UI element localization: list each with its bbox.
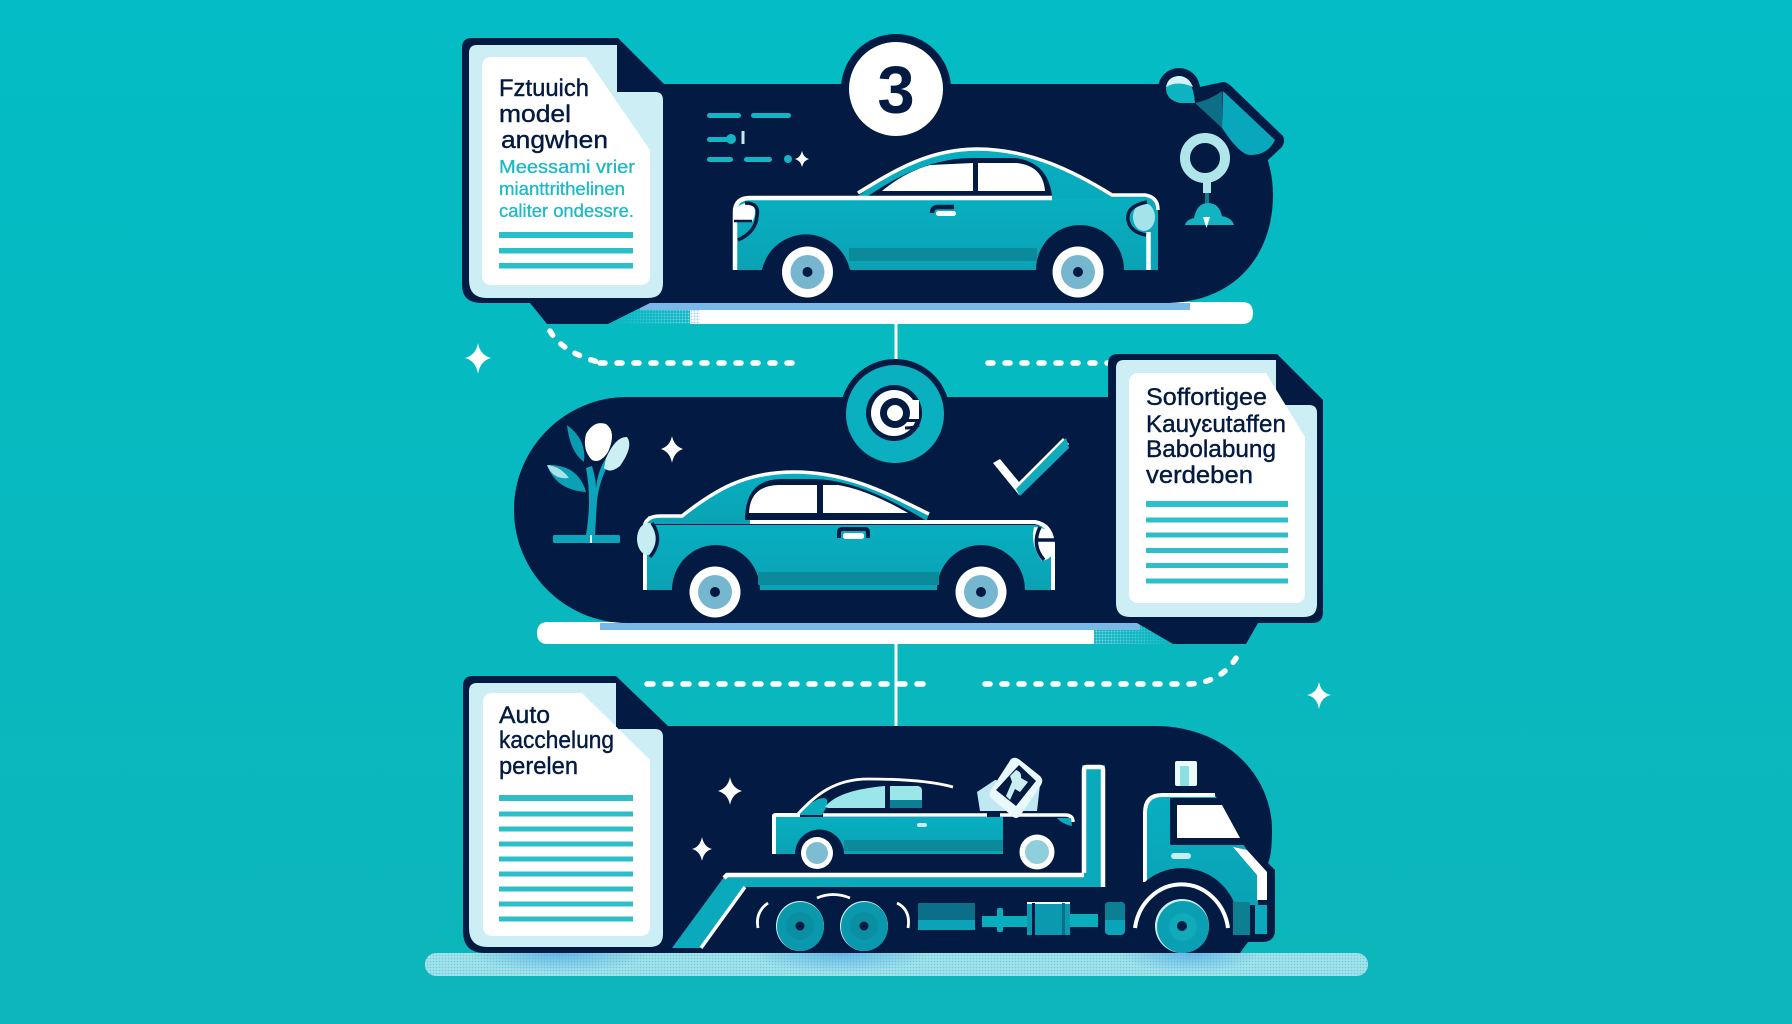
sparkle: lower	[692, 837, 712, 861]
wheel	[1155, 899, 1209, 953]
car 1	[734, 149, 1158, 298]
text lines 1	[499, 232, 633, 268]
heading 2: verdeben	[1146, 462, 1253, 489]
text block 1: Meessami vrier	[499, 157, 635, 177]
text block 1: caliter ondessre.	[499, 201, 634, 221]
ground bar: panel 1	[610, 302, 1253, 324]
sparkle: panel 2	[661, 436, 683, 463]
heading 1: Fztuuich	[499, 75, 589, 102]
text lines 3	[499, 795, 633, 922]
wheel	[840, 901, 888, 951]
heading 3: perelen	[499, 753, 578, 780]
heading 3	[499, 702, 614, 780]
heading 2: Soffortigee	[1146, 384, 1267, 411]
sparkle: left	[465, 343, 491, 374]
icon: check mark	[993, 438, 1069, 496]
badge: number 3: 3	[877, 53, 915, 128]
panel 3: dark card	[463, 676, 1275, 953]
wheel	[690, 566, 740, 618]
wheel	[801, 837, 833, 869]
sparkle: right	[1307, 682, 1331, 709]
heading 2: Kauyɛutaffen	[1146, 411, 1286, 438]
car 3 on flatbed	[773, 778, 1073, 870]
heading 1	[499, 75, 608, 154]
heading 1: model	[499, 101, 571, 128]
badge: number 3	[841, 34, 951, 144]
wheel	[782, 246, 833, 298]
badge: at sign	[840, 359, 950, 469]
heading 3: kacchelung	[499, 727, 614, 754]
heading 2	[1146, 384, 1286, 489]
small dash marks	[707, 113, 809, 167]
wheel	[1020, 834, 1054, 870]
document 1	[469, 45, 663, 298]
ground band: panel 3	[425, 953, 1368, 976]
heading 1: angwhen	[501, 127, 608, 154]
wheel	[776, 901, 824, 951]
sparkle: upper	[718, 777, 742, 805]
icon: lock tag	[977, 758, 1042, 818]
heading 2: Babolabung	[1146, 436, 1276, 463]
icon: plant	[547, 423, 629, 543]
truck undercarriage	[757, 894, 1125, 951]
panel 2: dark card	[514, 354, 1323, 644]
text block 1: mianttrithelinen	[499, 179, 625, 199]
flatbed	[672, 765, 1105, 948]
connector: vertical line bottom	[894, 640, 898, 726]
dashed path: upper right	[988, 360, 1110, 366]
connector: vertical line top	[894, 320, 898, 360]
panel 1: dark card	[462, 38, 1284, 324]
dashed path: upper left	[550, 331, 803, 363]
heading 3: Auto	[499, 702, 550, 729]
car 2	[637, 472, 1055, 618]
dashed path: lower right	[985, 651, 1240, 684]
ground bar: panel 2	[537, 622, 1179, 644]
icon: pin and tag	[1158, 68, 1284, 228]
document 2	[1116, 360, 1317, 617]
wheel	[956, 566, 1006, 618]
text lines 2	[1146, 501, 1288, 584]
truck cab	[1125, 761, 1267, 953]
text block 1	[499, 157, 635, 221]
document 3	[469, 683, 663, 947]
dashed path: lower left	[647, 681, 933, 687]
wheel	[1052, 246, 1104, 298]
